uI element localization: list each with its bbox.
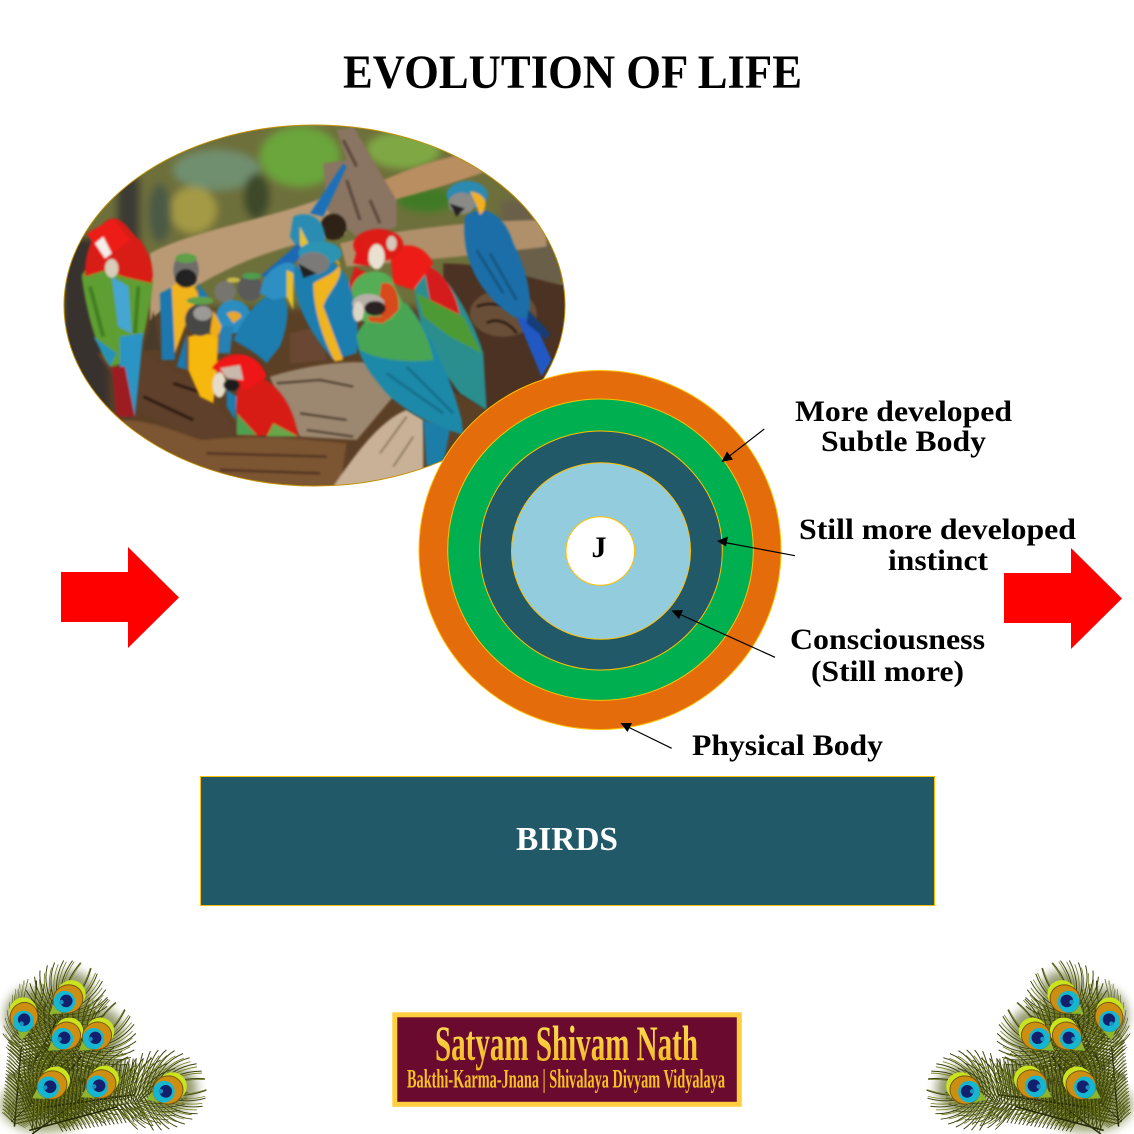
- photo: macaws on driftwood in an oval: [60, 120, 570, 490]
- ring: physical body: [419, 370, 781, 730]
- label: consciousness: Consciousness: [790, 623, 985, 656]
- label: physical body: Physical Body: [692, 729, 883, 762]
- title: EVOLUTION OF LIFE: [343, 46, 802, 99]
- banner: birds: [200, 776, 934, 906]
- macaws: [82, 163, 552, 467]
- decoration: peacock feathers left: [0, 946, 211, 1134]
- driftwood: [97, 127, 570, 490]
- front green macaw: [352, 271, 463, 467]
- oval outline: [64, 125, 565, 486]
- label: consciousness: (Still more): [811, 655, 964, 688]
- arrow: right: [1004, 548, 1122, 649]
- decoration: peacock feathers right: [922, 946, 1133, 1134]
- bottom red macaw: [212, 354, 298, 437]
- logo: Satyam Shivam Nath: [395, 1015, 739, 1104]
- logo: Satyam Shivam Nath: Bakthi-Karma-Jnana | Shivalaya Divyam Vidyalaya: [407, 1064, 725, 1094]
- ring: consciousness: [512, 463, 690, 639]
- ring: subtle body: [448, 399, 753, 700]
- label: still more developed instinct: Still more developed: [799, 513, 1076, 546]
- front yellow macaw: [177, 297, 223, 408]
- center blue-yellow macaw: [293, 241, 358, 362]
- left red-green macaw: [82, 218, 153, 417]
- background foliage: [60, 120, 570, 490]
- left yellow macaw: [160, 253, 208, 360]
- mid blue wing: [233, 293, 287, 363]
- concentric body diagram: [419, 370, 781, 730]
- middle back blue: [290, 214, 325, 252]
- ring: instinct: [480, 431, 722, 670]
- label: more developed subtle body: More developed: [795, 395, 1012, 428]
- core: jiva: [566, 517, 635, 585]
- far-right blue-yellow macaw: [447, 181, 552, 377]
- label: still more developed instinct: instinct: [888, 544, 988, 577]
- core letter J: J: [592, 531, 606, 564]
- pointer arrows: [620, 429, 795, 748]
- label: consciousness: [790, 623, 985, 688]
- label: more developed subtle body: [795, 395, 1012, 458]
- small back macaws: [214, 281, 236, 302]
- arrow: left: [61, 547, 179, 648]
- logo: Satyam Shivam Nath: Satyam Shivam Nath: [435, 1015, 698, 1071]
- label: more developed subtle body: Subtle Body: [821, 425, 986, 458]
- label: still more developed instinct: [799, 513, 1076, 577]
- red-green macaw behind: [347, 229, 487, 410]
- banner: birds: BIRDS: [516, 821, 618, 858]
